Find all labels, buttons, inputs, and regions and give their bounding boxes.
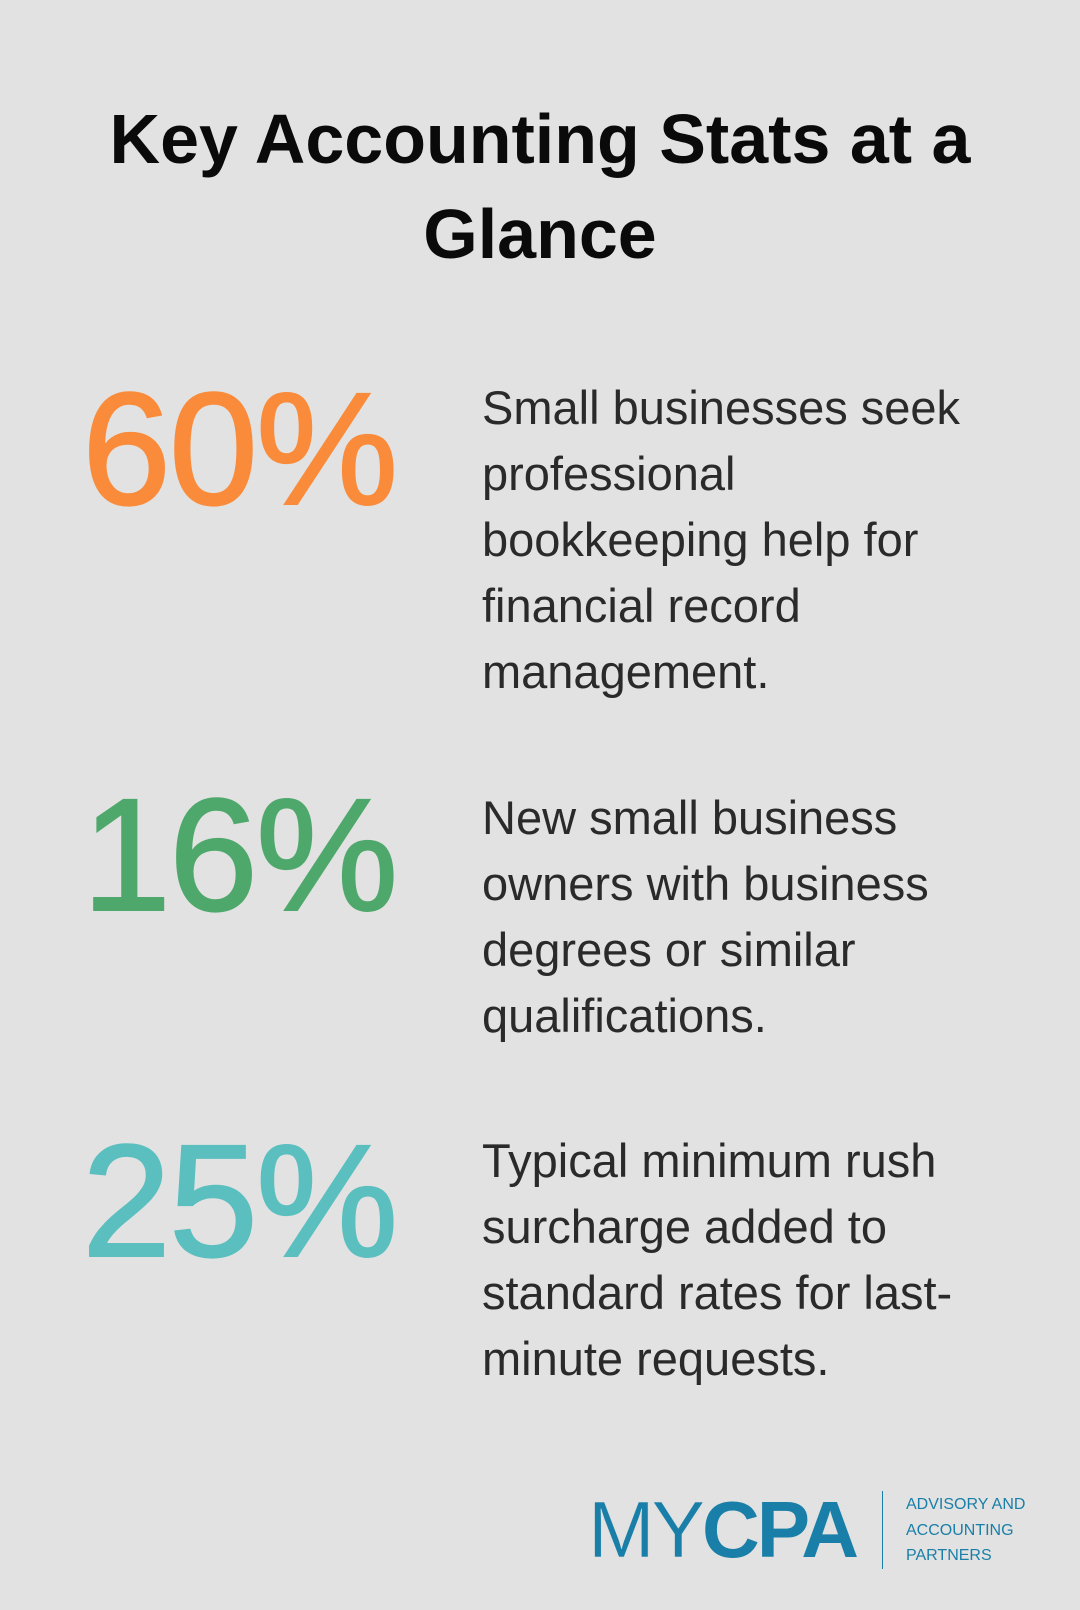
text: 25% description: minute requests. <box>482 1332 829 1385</box>
logo wordmark: MYCPA <box>588 1485 856 1574</box>
text: 16% description: owners with business <box>482 857 929 910</box>
text: 60% description: management. <box>482 645 769 698</box>
text: 25% description: Typical minimum rush <box>482 1134 936 1187</box>
title: Key Accounting Stats at a <box>110 100 970 178</box>
text: 16% description: New small business <box>482 791 897 844</box>
text: 60% description: bookkeeping help for <box>482 513 918 566</box>
title <box>110 100 971 273</box>
text: 25% description: standard rates for last- <box>482 1266 952 1319</box>
text: 60% description: professional <box>482 447 735 500</box>
text: 60% description <box>482 381 960 698</box>
text: 16% description: degrees or similar <box>482 923 856 976</box>
text: 60% description: financial record <box>482 579 801 632</box>
text: 16% description: qualifications. <box>482 989 767 1042</box>
logo tagline <box>906 1496 1025 1564</box>
logo tagline: PARTNERS <box>906 1547 992 1564</box>
logo tagline: ACCOUNTING <box>906 1522 1014 1538</box>
stat: 16%: 16% <box>82 765 396 944</box>
title: Glance <box>423 195 657 273</box>
text: 16% description <box>482 791 929 1042</box>
text: 60% description: Small businesses seek <box>482 381 960 434</box>
stat: 60%: 60% <box>82 359 396 538</box>
logo <box>588 1485 1025 1574</box>
logo tagline: ADVISORY AND <box>906 1496 1025 1513</box>
stat: 25%: 25% <box>82 1111 396 1290</box>
logo divider <box>882 1491 883 1569</box>
text: 25% description: surcharge added to <box>482 1200 887 1253</box>
text: 25% description <box>482 1134 952 1385</box>
